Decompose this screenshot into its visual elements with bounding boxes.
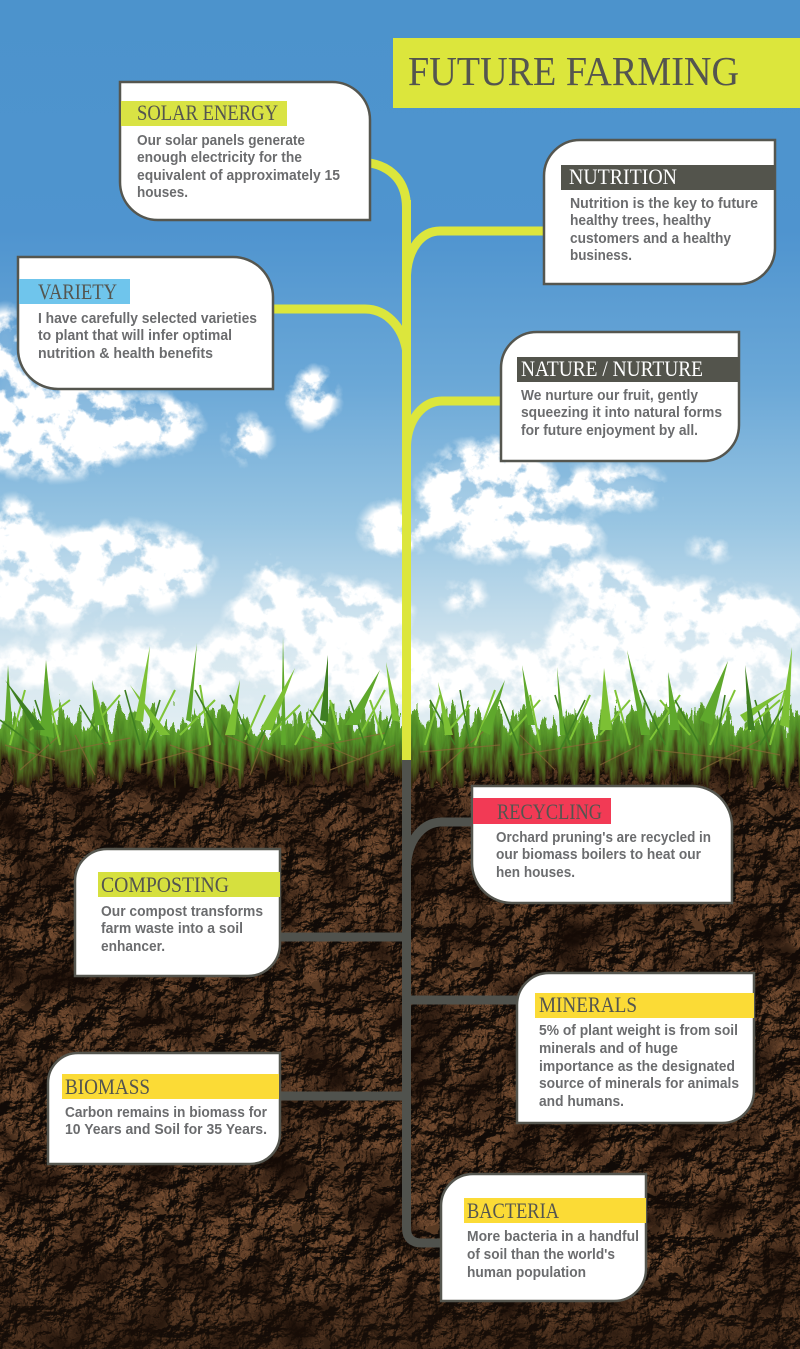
panel: variety: VARIETY	[38, 279, 117, 304]
panel: composting: enhancer.	[101, 939, 165, 955]
panel: minerals: source of minerals for animals	[539, 1076, 739, 1092]
panel: nutrition: business.	[570, 248, 632, 264]
panel: nutrition: Nutrition is the key to future	[570, 196, 758, 212]
panel: composting: COMPOSTING	[101, 872, 229, 897]
panel: recycling	[472, 786, 732, 903]
panel: minerals: importance as the designated	[539, 1059, 735, 1075]
panel: recycling: RECYCLING	[497, 799, 602, 824]
branch: composting	[279, 932, 408, 942]
panel: minerals: minerals and of huge	[539, 1041, 678, 1057]
title: FUTURE FARMING	[408, 48, 739, 94]
branch: nutrition	[406, 231, 545, 275]
panel: composting: farm waste into a soil	[101, 921, 243, 937]
sky background	[0, 0, 800, 770]
branch: minerals	[406, 996, 518, 1004]
panel: nature nurture: We nurture our fruit, gently	[521, 388, 698, 404]
panel: bacteria: BACTERIA	[467, 1198, 559, 1223]
panel: variety: I have carefully selected varieties	[38, 311, 257, 327]
panel: nature nurture: squeezing it into natural forms	[521, 405, 722, 421]
panel: minerals: MINERALS	[539, 992, 637, 1017]
panel: biomass	[48, 1053, 280, 1164]
branch: recycling	[406, 822, 474, 866]
panel: recycling: hen houses.	[496, 865, 575, 881]
panel: composting	[75, 849, 280, 976]
panel: biomass: 10 Years and Soil for 35 Years.	[65, 1122, 267, 1138]
panel: bacteria: human population	[467, 1265, 586, 1281]
panel: solar energy: Our solar panels generate	[137, 133, 305, 149]
panel: nature nurture: NATURE / NURTURE	[521, 356, 703, 381]
panel: bacteria	[441, 1174, 646, 1301]
tree trunk above ground	[402, 200, 411, 760]
panel: solar energy	[120, 82, 370, 220]
panel: bacteria: of soil than the world's	[467, 1247, 615, 1263]
tree trunk below ground	[406, 760, 443, 1243]
branch: variety	[272, 309, 406, 350]
panel: nutrition: customers and a healthy	[570, 231, 731, 247]
grass	[0, 637, 800, 776]
panel: nature nurture	[501, 332, 739, 461]
panel: bacteria: More bacteria in a handful	[467, 1229, 639, 1245]
panel: nutrition: NUTRITION	[569, 164, 677, 189]
panel: biomass: BIOMASS	[65, 1074, 150, 1099]
panel: nutrition	[544, 140, 775, 284]
soil	[0, 745, 800, 1349]
title	[393, 38, 800, 108]
panel: minerals	[517, 973, 754, 1123]
panel: recycling: Orchard pruning's are recycled in	[496, 830, 711, 846]
panel: solar energy: enough electricity for the	[137, 150, 302, 166]
branch: biomass	[279, 1092, 408, 1100]
panel: biomass: Carbon remains in biomass for	[65, 1105, 267, 1121]
panel: solar energy: houses.	[137, 185, 188, 201]
branch: solar energy	[370, 163, 406, 208]
panel: minerals: and humans.	[539, 1094, 624, 1110]
panel: variety: to plant that will infer optimal	[38, 328, 232, 344]
panel: minerals: 5% of plant weight is from soil	[539, 1023, 738, 1039]
panel: solar energy: SOLAR ENERGY	[137, 100, 278, 125]
panel: nutrition: healthy trees, healthy	[570, 213, 711, 229]
panel: nature nurture: for future enjoyment by all.	[521, 423, 698, 439]
panel: composting: Our compost transforms	[101, 904, 263, 920]
panel: variety	[18, 257, 273, 389]
panel: recycling: our biomass boilers to heat our	[496, 847, 701, 863]
clouds	[0, 310, 800, 711]
panel: solar energy: equivalent of approximately 15	[137, 168, 340, 184]
panel: variety: nutrition & health benefits	[38, 346, 213, 362]
branch: nature nurture	[406, 401, 502, 445]
